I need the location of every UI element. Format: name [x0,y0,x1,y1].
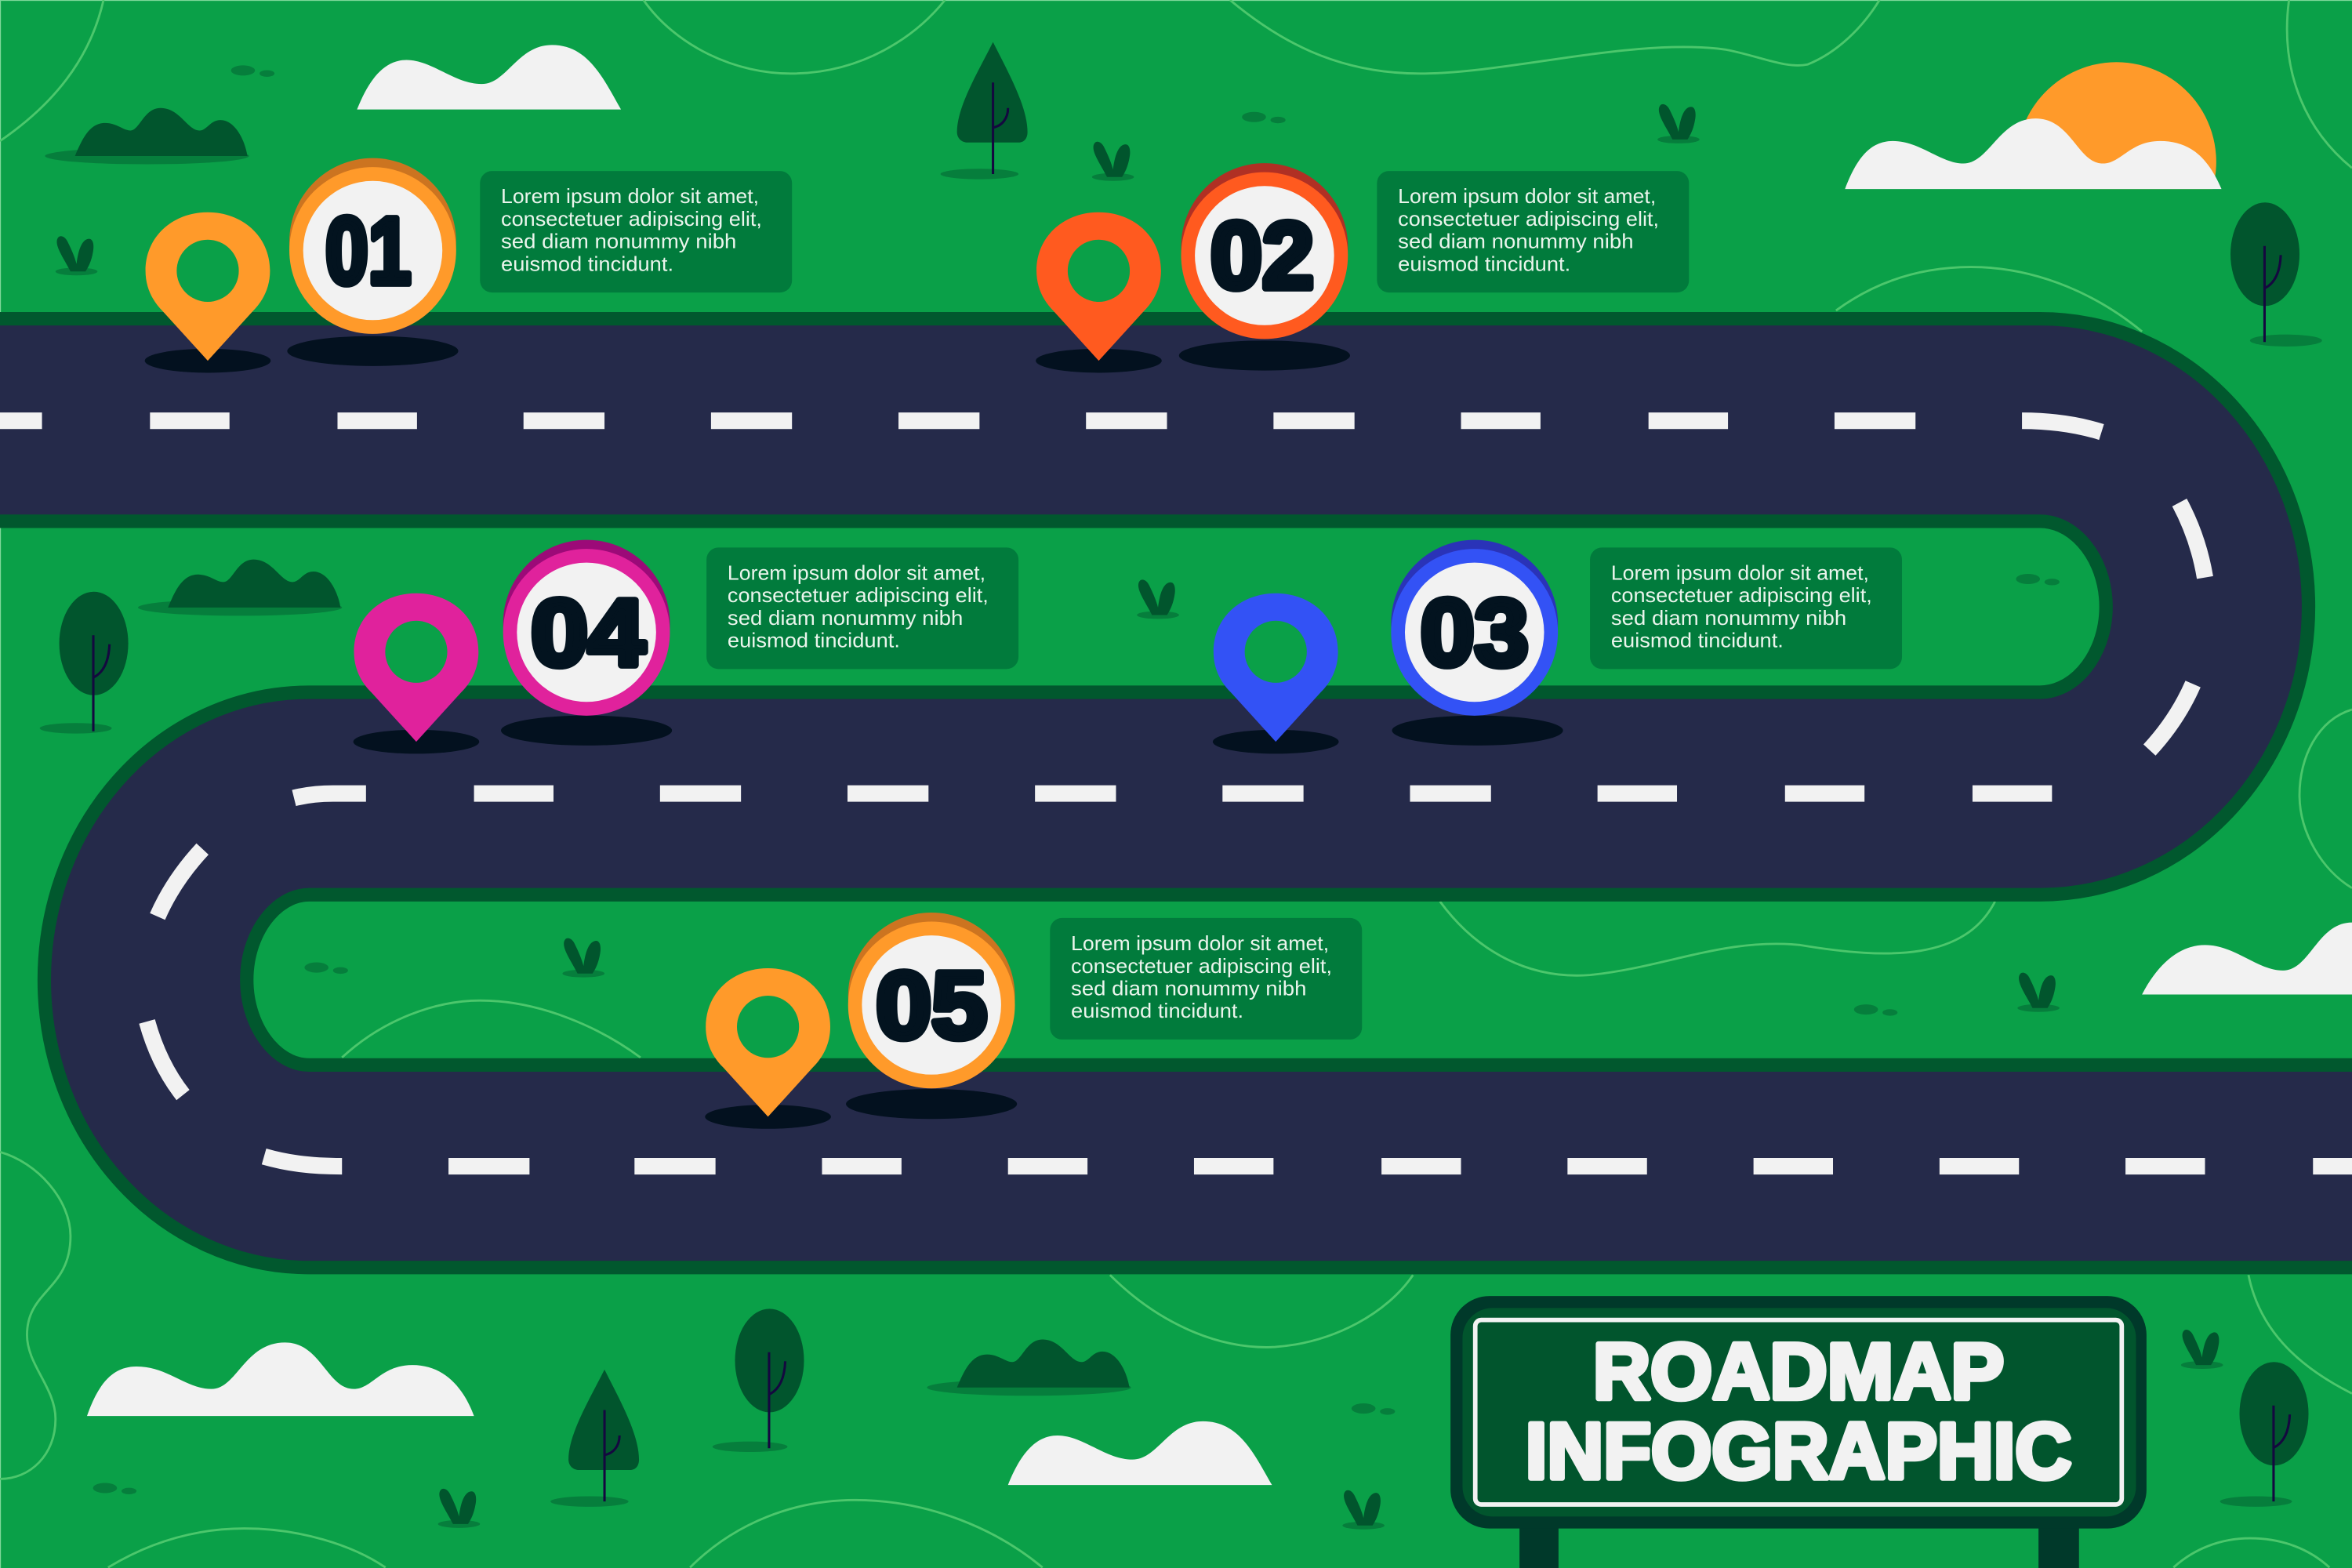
step 04 [354,540,1018,753]
pebbles [93,65,2060,1494]
tree: oval bottom right [2220,1362,2309,1507]
text box 04 [706,547,1018,669]
pin 01 [145,212,270,372]
road sign: title [1450,1296,2147,1568]
road sign: title: INFOGRAPHIC [1526,1407,2071,1496]
cloud: bottom left [87,1342,474,1416]
pin 02 [1036,212,1162,372]
badge 04: 04 [531,580,645,686]
tree: oval middle left [40,592,129,734]
step 03 [1213,540,1902,753]
cloud: top left [357,45,621,110]
bush: bottom centre [927,1340,1131,1396]
text box 01: consectetuer adipiscing elit, [501,209,762,230]
badge 04 [501,540,672,746]
sun [2016,62,2216,189]
road [0,420,2352,1167]
bush: middle left [138,560,342,615]
text box 05: Lorem ipsum dolor sit amet, [1071,933,1329,955]
badge 02 [1179,163,1350,371]
text box 03 [1590,547,1902,669]
text box 04: sed diam nonummy nibh [728,608,963,630]
text box 03: sed diam nonummy nibh [1611,608,1846,630]
text box 02 [1377,171,1689,292]
pin 05 [705,968,831,1129]
cloud: right edge [2142,923,2352,994]
text box 02: sed diam nonummy nibh [1398,231,1634,253]
text box 05: consectetuer adipiscing elit, [1071,956,1332,978]
tree: oval bottom centre [713,1308,804,1452]
text box 01: Lorem ipsum dolor sit amet, [501,186,759,208]
text box 03: Lorem ipsum dolor sit amet, [1611,562,1869,584]
pin 03 [1213,593,1339,753]
title text: ROADMAP [1593,1327,2004,1416]
step 01 [145,158,792,372]
badge 03 [1391,540,1563,746]
text box 04: consectetuer adipiscing elit, [728,585,989,607]
badge 05: 05 [876,953,987,1058]
text box 01 [480,171,792,292]
text box 05 [1050,918,1362,1040]
step 05 [705,913,1362,1129]
tree: oval top right [2230,202,2322,347]
step 02 [1036,163,1689,372]
badge 01: 01 [325,198,411,304]
badge 02: 02 [1210,202,1314,308]
text box 03: euismod tincidunt. [1611,630,1784,652]
text box 03: consectetuer adipiscing elit, [1611,585,1872,607]
text box 05: sed diam nonummy nibh [1071,978,1306,1000]
badge 05 [846,913,1017,1119]
bush: top left [45,108,249,165]
tree: pointed bottom [550,1370,639,1507]
cloud: in front of sun [1845,118,2222,189]
text box 01: sed diam nonummy nibh [501,231,736,253]
pin 04 [354,593,479,753]
text box 04: euismod tincidunt. [728,630,900,652]
badge 03: 03 [1421,580,1529,686]
text box 02: euismod tincidunt. [1398,253,1570,275]
text box 05: euismod tincidunt. [1071,1000,1243,1022]
text box 02: Lorem ipsum dolor sit amet, [1398,186,1656,208]
badge 01 [287,158,459,366]
text box 01: euismod tincidunt. [501,253,673,275]
text box 02: consectetuer adipiscing elit, [1398,209,1659,230]
text box 04: Lorem ipsum dolor sit amet, [728,562,985,584]
tree: pointed top [941,42,1028,180]
cloud: bottom centre [1008,1421,1272,1485]
